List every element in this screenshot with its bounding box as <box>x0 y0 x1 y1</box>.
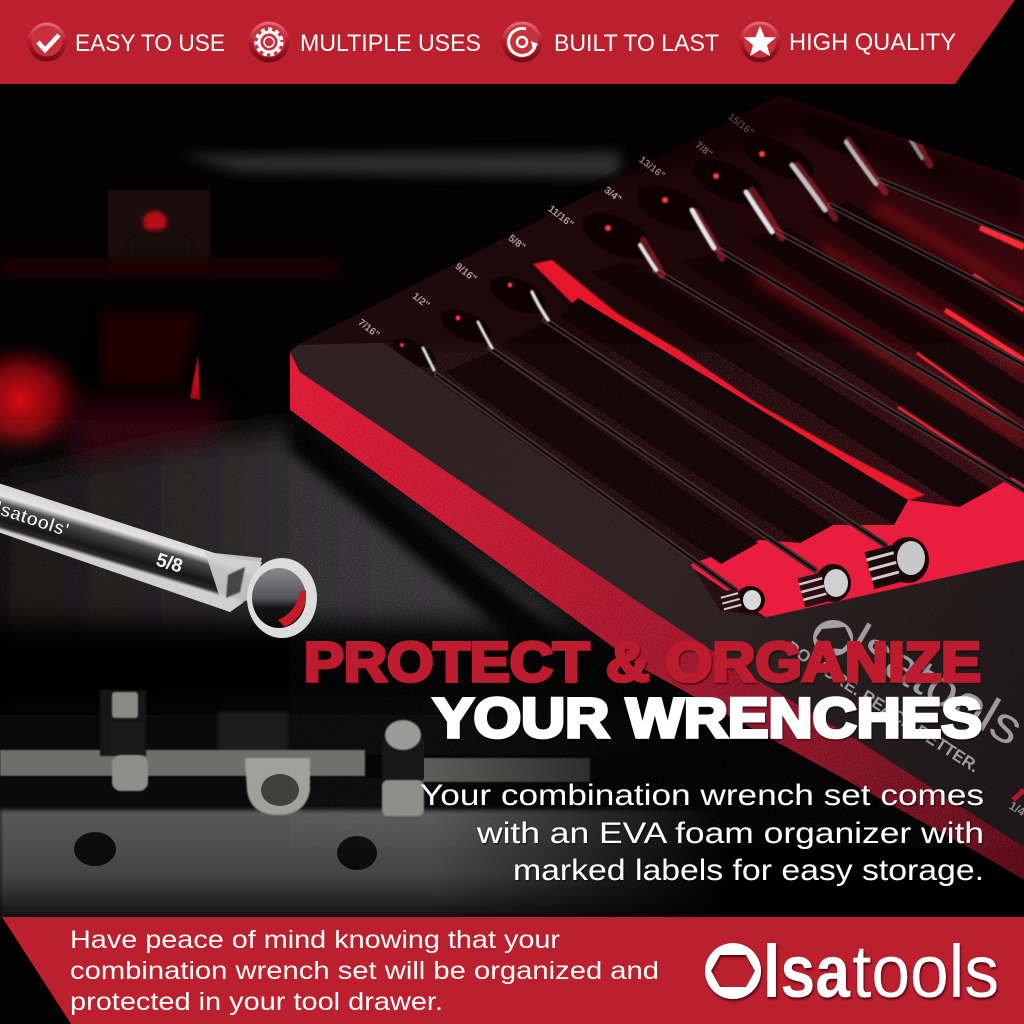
Olsatools logo: tools <box>852 930 999 1013</box>
feature: high quality <box>740 22 956 62</box>
red channel glow <box>750 200 1024 445</box>
Olsatools logo: lsa <box>763 930 851 1013</box>
bottom banner <box>2 917 1024 1024</box>
wrench box ends in foam <box>719 537 929 614</box>
foam size labels <box>356 112 756 341</box>
feature: built to last: BUILT TO LAST <box>554 30 719 57</box>
sleeve tagline: DO MORE. REACH BETTER. <box>783 637 983 776</box>
feature: high quality: HIGH QUALITY <box>789 29 956 56</box>
bottom message <box>70 926 659 1016</box>
tray: EVA foam organizer <box>290 95 1024 880</box>
wrench shafts <box>437 180 1024 590</box>
sleeve brand text: lsatools <box>840 613 1024 757</box>
sleeve red tick <box>1013 790 1024 800</box>
tray back fade <box>560 95 1024 230</box>
foam size labels: 9/16" <box>453 261 479 285</box>
feature: easy to use: EASY TO USE <box>75 30 225 57</box>
foam size labels: 3/4" <box>602 185 623 205</box>
body copy: with an EVA foam organizer with <box>476 817 984 850</box>
foam size labels: 13/16" <box>636 155 667 182</box>
feature: easy to use <box>28 22 225 62</box>
foam size labels: 1/2" <box>410 291 431 311</box>
foam lip and sleeve with printed logo <box>290 343 1024 847</box>
foam size labels: 7/8" <box>693 140 714 160</box>
bottom message: protected in your tool drawer. <box>70 988 443 1016</box>
red glints at right <box>898 227 1024 490</box>
bright red foam base <box>688 470 1024 618</box>
background photo: engine parts <box>0 690 1024 920</box>
bottom message: Have peace of mind knowing that your <box>70 926 560 954</box>
feature: multiple uses: MULTIPLE USES <box>300 30 481 57</box>
headline: PROTECT & ORGANIZE <box>304 630 981 693</box>
top feature banner <box>0 0 1015 84</box>
sleeve logo mark <box>813 620 853 656</box>
bottom message: combination wrench set will be organized and <box>70 957 659 985</box>
background photo: grey textured surface <box>0 412 660 714</box>
foam size labels: 15/16" <box>725 112 756 139</box>
wrench ring head <box>247 558 317 638</box>
headline: YOUR WRENCHES <box>433 686 982 749</box>
feature: multiple uses <box>248 22 481 62</box>
foam bars <box>445 202 1024 564</box>
wrench 5/8 stamp: 5/8 <box>154 550 185 578</box>
foam size labels: 7/16" <box>356 317 382 341</box>
body copy <box>420 779 984 887</box>
tray red side wall <box>290 352 1024 880</box>
foam size labels: 5/8" <box>506 233 527 253</box>
body copy: marked labels for easy storage. <box>513 854 984 887</box>
tray top surface <box>298 95 1024 860</box>
headline <box>304 630 982 749</box>
red gash: empty 5/8 slot <box>533 260 925 505</box>
foam size labels: 11/16" <box>546 204 576 231</box>
feature: built to last <box>502 22 719 62</box>
wrench open heads <box>388 107 930 373</box>
body copy: Your combination wrench set comes <box>420 779 984 812</box>
loose chrome 5/8 wrench <box>0 483 317 638</box>
Olsatools logo <box>705 930 999 1013</box>
